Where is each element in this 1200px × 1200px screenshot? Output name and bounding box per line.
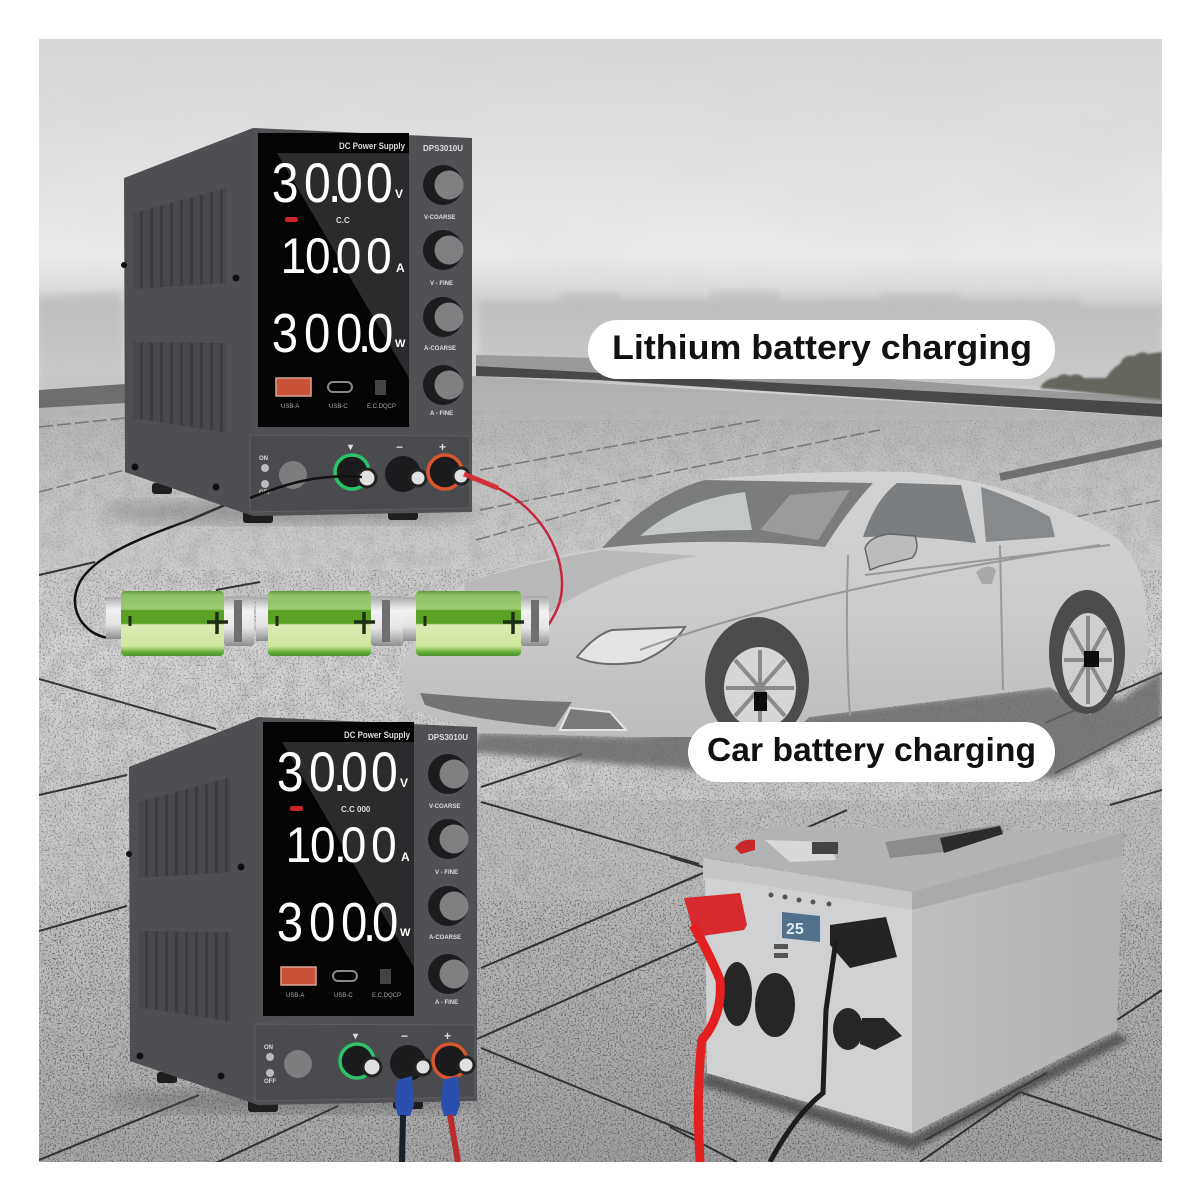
DC port: E.C.DQCP bbox=[372, 993, 401, 999]
power switch: ON bbox=[259, 456, 268, 462]
USB-C: USB-C bbox=[334, 993, 353, 999]
side panel bbox=[124, 128, 253, 516]
black wire over panel bbox=[250, 476, 362, 498]
positive terminal bbox=[433, 1029, 474, 1078]
red cable bbox=[693, 925, 720, 1162]
knob V-FINE bbox=[423, 230, 464, 287]
knob A-COARSE bbox=[428, 886, 468, 941]
knob A-FINE: A - FINE bbox=[430, 411, 453, 417]
black plug bbox=[830, 917, 897, 968]
battery top bbox=[703, 826, 1123, 892]
knob V-FINE: V - FINE bbox=[435, 870, 458, 876]
battery lid strip bbox=[703, 858, 912, 910]
side panel bbox=[129, 717, 258, 1105]
ground terminal: ▾ bbox=[352, 1031, 359, 1042]
shadow bbox=[100, 500, 480, 524]
right parapet bbox=[476, 355, 1162, 417]
power: 300.0 bbox=[272, 303, 393, 364]
battery LCD bbox=[782, 912, 820, 942]
top connector bbox=[735, 840, 838, 862]
negative terminal: − bbox=[401, 1029, 408, 1043]
USB-C: USB-C bbox=[329, 404, 348, 410]
ground terminal bbox=[340, 1031, 381, 1078]
power switch: OFF bbox=[259, 490, 271, 496]
model: DPS3010U bbox=[423, 144, 463, 153]
knob V-COARSE: V-COARSE bbox=[429, 804, 460, 810]
left parapet bbox=[39, 384, 125, 408]
power supply: bottom bbox=[105, 717, 485, 1113]
indicators: C.C bbox=[336, 216, 350, 225]
rooftop floor bbox=[39, 376, 1162, 1162]
display bbox=[263, 722, 414, 1016]
DC port: E.C.DQCP bbox=[367, 404, 396, 410]
cell 3 bbox=[403, 591, 549, 656]
cell 1 bbox=[106, 591, 254, 656]
feet bbox=[157, 1072, 423, 1112]
lower panel bbox=[255, 1024, 475, 1101]
voltage: 30.00 bbox=[277, 742, 398, 804]
car shadow bbox=[470, 670, 1162, 778]
faint upper floor joints bbox=[39, 418, 1162, 540]
car mirror bbox=[865, 534, 917, 570]
door handle bbox=[976, 566, 996, 584]
USB-A: USB-A bbox=[281, 404, 299, 410]
distant trees bbox=[1040, 352, 1162, 400]
battery cells bbox=[106, 591, 549, 656]
negative terminal bbox=[390, 1029, 431, 1081]
dark joint band bbox=[1000, 443, 1162, 477]
knob V-COARSE: V-COARSE bbox=[424, 215, 455, 221]
USB-A bbox=[281, 967, 316, 999]
USB-A bbox=[276, 378, 311, 410]
car rear wheel bbox=[1049, 590, 1125, 714]
indicators: C.C 000 bbox=[341, 805, 371, 814]
power: 300.0 bbox=[277, 892, 398, 953]
knob A-COARSE: A-COARSE bbox=[429, 935, 461, 941]
side vents bbox=[133, 188, 226, 433]
front panel bbox=[258, 717, 477, 1105]
voltage: 30.00 bbox=[272, 153, 393, 215]
windshield bbox=[602, 480, 873, 548]
car headlight bbox=[577, 627, 685, 664]
display bbox=[258, 133, 409, 427]
feet bbox=[152, 483, 418, 523]
power: W bbox=[395, 338, 406, 350]
car grille bbox=[420, 693, 572, 727]
power switch: OFF bbox=[264, 1079, 276, 1085]
knob V-COARSE bbox=[428, 754, 468, 810]
USB-C bbox=[333, 971, 357, 999]
red clamp bbox=[684, 893, 747, 937]
indicators bbox=[285, 216, 350, 225]
knob V-FINE: V - FINE bbox=[430, 281, 453, 287]
distant city bbox=[39, 290, 1162, 390]
indicators bbox=[290, 805, 371, 814]
side vents bbox=[138, 777, 231, 1022]
knob V-COARSE bbox=[423, 165, 464, 221]
ground terminal bbox=[335, 442, 376, 489]
screws bbox=[126, 851, 244, 1080]
car fog lamp bbox=[560, 708, 626, 730]
black cable bbox=[770, 940, 836, 1162]
positive terminal: + bbox=[444, 1029, 451, 1043]
front panel bbox=[253, 128, 472, 516]
label: car battery charging: Car battery charging bbox=[707, 731, 1036, 768]
voltage: V bbox=[400, 776, 408, 790]
positive terminal bbox=[428, 440, 469, 489]
screws bbox=[121, 262, 240, 490]
current: 10.00 bbox=[286, 818, 397, 873]
knob A-FINE: A - FINE bbox=[435, 1000, 458, 1006]
label: lithium battery charging: Lithium battery charging bbox=[612, 329, 1032, 367]
knob A-COARSE bbox=[423, 297, 464, 352]
knob A-COARSE: A-COARSE bbox=[424, 346, 456, 352]
top handle bbox=[885, 825, 1004, 858]
USB ports bbox=[774, 944, 788, 958]
label: lithium battery charging bbox=[588, 320, 1055, 379]
lower panel bbox=[250, 435, 470, 512]
negative terminal: − bbox=[396, 440, 403, 454]
USB-A: USB-A bbox=[286, 993, 304, 999]
DC port bbox=[367, 380, 396, 410]
power switch bbox=[264, 1045, 312, 1085]
car bbox=[400, 472, 1162, 778]
rear window bbox=[981, 487, 1055, 542]
red lead with blue terminal bbox=[441, 1076, 460, 1162]
model: DPS3010U bbox=[428, 733, 468, 742]
pack shadow bbox=[700, 1033, 1130, 1150]
sockets bbox=[722, 962, 902, 1050]
power supply: top bbox=[100, 128, 498, 524]
voltage: V bbox=[395, 187, 403, 201]
cell 2 bbox=[256, 591, 403, 656]
black lead bbox=[75, 477, 364, 638]
current: 10.00 bbox=[281, 229, 392, 284]
knob V-FINE bbox=[428, 819, 468, 876]
battery side lid bbox=[912, 833, 1123, 910]
battery LEDs bbox=[768, 892, 832, 906]
title: DC Power Supply bbox=[339, 141, 405, 151]
power switch: ON bbox=[264, 1045, 273, 1051]
ground terminal: ▾ bbox=[347, 442, 354, 453]
label: car battery charging bbox=[688, 722, 1055, 782]
side window bbox=[863, 483, 976, 543]
hood shading bbox=[464, 550, 698, 612]
negative terminal bbox=[385, 440, 426, 492]
battery pack bbox=[684, 825, 1130, 1162]
USB-C bbox=[328, 382, 352, 410]
black lead with blue terminal bbox=[395, 1076, 414, 1162]
positive terminal: + bbox=[439, 440, 446, 454]
shadow bbox=[105, 1089, 485, 1113]
cloudy sky bbox=[39, 39, 1162, 409]
red lead bbox=[466, 478, 562, 628]
knob A-FINE bbox=[423, 365, 464, 417]
battery side bbox=[912, 856, 1122, 1133]
floor tile joints bbox=[39, 562, 1162, 1163]
DC port bbox=[372, 969, 401, 999]
current: A bbox=[401, 850, 410, 864]
current: A bbox=[396, 261, 405, 275]
car door lines bbox=[640, 545, 1110, 716]
power: W bbox=[400, 927, 411, 939]
battery front bbox=[705, 878, 912, 1133]
knob A-FINE bbox=[428, 954, 468, 1006]
battery LCD: 25 bbox=[786, 921, 804, 938]
car front wheel bbox=[705, 617, 809, 722]
power switch bbox=[259, 456, 307, 496]
title: DC Power Supply bbox=[344, 730, 410, 740]
car body bbox=[400, 472, 1148, 737]
red clip bbox=[464, 474, 498, 488]
